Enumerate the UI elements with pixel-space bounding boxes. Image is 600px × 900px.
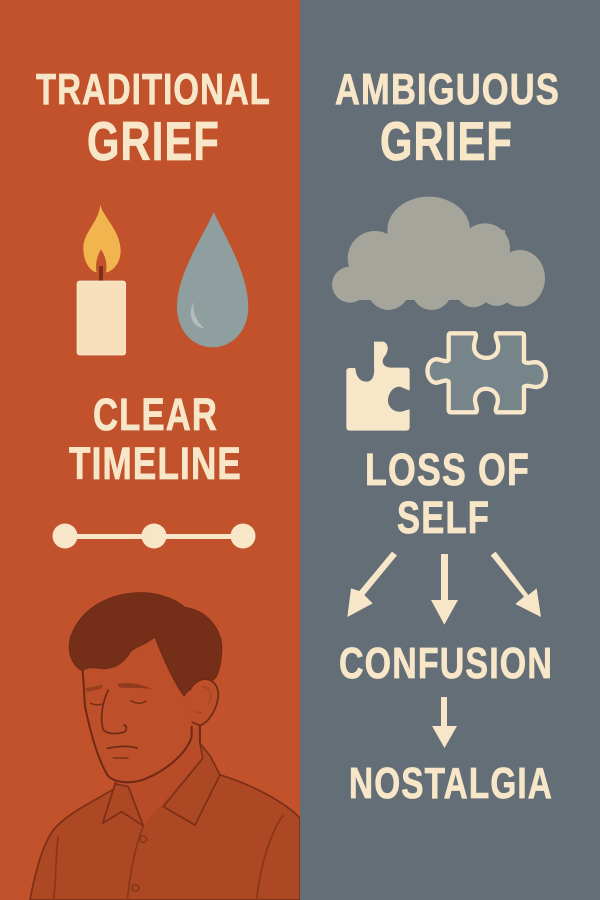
face xyxy=(83,637,192,782)
arrows: three branching down from loss of self xyxy=(347,552,541,625)
shirt xyxy=(30,733,300,900)
icon: candle xyxy=(77,205,126,355)
icon: grey cloud xyxy=(332,197,545,310)
arrow: left xyxy=(347,552,397,617)
arrow: right xyxy=(491,552,541,617)
heading: ambiguous grief xyxy=(335,65,560,172)
illustration: sad man with closed eyes xyxy=(30,593,300,900)
icon: outlined puzzle piece xyxy=(427,333,546,412)
text: clear timeline xyxy=(69,389,242,489)
text: clear timeline: TIMELINE xyxy=(69,438,242,489)
collar xyxy=(103,743,220,826)
text: clear timeline: CLEAR xyxy=(93,389,218,440)
panel: traditional grief xyxy=(0,0,300,900)
text: loss of self: SELF xyxy=(397,492,490,543)
text: loss of self xyxy=(365,444,530,543)
arrow: center xyxy=(431,554,458,625)
icon: solid puzzle piece xyxy=(346,342,410,431)
panel: ambiguous grief xyxy=(300,0,600,900)
facial features xyxy=(91,690,146,758)
icon: water drop xyxy=(177,212,248,347)
text: loss of self: LOSS OF xyxy=(365,444,530,495)
shirt details xyxy=(53,815,283,900)
heading: traditional grief xyxy=(36,65,271,172)
neck xyxy=(115,726,202,825)
heading: traditional grief: TRADITIONAL xyxy=(36,65,271,114)
heading: traditional grief: GRIEF xyxy=(87,110,220,172)
icon: timeline with three points xyxy=(52,524,256,548)
arrow: confusion to nostalgia xyxy=(432,697,457,748)
hair xyxy=(69,593,222,696)
heading: ambiguous grief: GRIEF xyxy=(380,110,513,172)
ear xyxy=(187,679,218,726)
